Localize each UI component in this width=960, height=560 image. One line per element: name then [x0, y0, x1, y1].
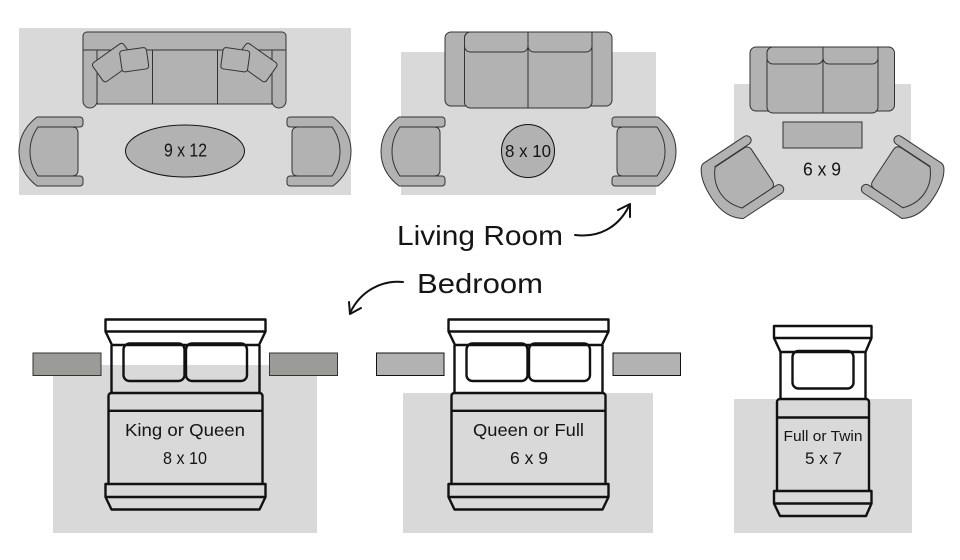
bedroom set: full or twin [734, 326, 912, 533]
rug label: 5 x 7: 5 x 7 [805, 449, 842, 468]
armchair right [612, 117, 676, 186]
bed label: King or Queen: King or Queen [125, 420, 245, 440]
arrow: living room, pointing up right [575, 204, 630, 236]
bed label: Full or Twin: Full or Twin [784, 429, 862, 445]
rug: 6 x 9 [734, 84, 911, 200]
rug label: 6 x 9: 6 x 9 [510, 448, 548, 468]
bedroom set: king or queen [33, 320, 338, 533]
oval table [126, 125, 244, 177]
nightstand right [270, 353, 338, 376]
rectangular table [783, 122, 862, 148]
sofa [750, 47, 894, 113]
nightstand left [376, 353, 444, 376]
armchair right [287, 117, 351, 186]
armchair right, angled [860, 134, 952, 227]
armchair left [19, 117, 83, 186]
living room set: 6 x 9 rug [693, 47, 952, 227]
round table [502, 124, 554, 178]
living room set: 8 x 10 rug [381, 32, 676, 195]
living room set: 9 x 12 rug [19, 28, 351, 195]
rug label: 8 x 10: 8 x 10 [163, 448, 207, 468]
bed frame [106, 320, 266, 510]
arrow: bedroom, pointing down left [349, 282, 403, 314]
armchair left, angled [693, 134, 786, 227]
label: 6 x 9: 6 x 9 [803, 160, 841, 180]
bed frame [448, 320, 608, 510]
rug: 9 x 12 [19, 28, 351, 195]
nightstand right [613, 353, 680, 376]
armchair left [381, 117, 445, 186]
rug: 8 x 10 bedroom [53, 365, 317, 533]
label: 8 x 10: 8 x 10 [505, 141, 551, 161]
bed label: Queen or Full: Queen or Full [473, 420, 584, 440]
rug: 5 x 7 [734, 399, 912, 533]
rug: 8 x 10 [401, 52, 656, 195]
bedroom set: queen or full [376, 320, 680, 533]
rug: 6 x 9 bedroom [403, 393, 653, 533]
heading: Living Room: Living Room [397, 220, 563, 251]
sofa [445, 32, 612, 108]
nightstand left [33, 353, 101, 376]
heading: Bedroom: Bedroom [417, 268, 543, 299]
bed frame [774, 326, 872, 516]
sofa with pillows [83, 32, 286, 108]
label: 9 x 12: 9 x 12 [164, 140, 207, 160]
